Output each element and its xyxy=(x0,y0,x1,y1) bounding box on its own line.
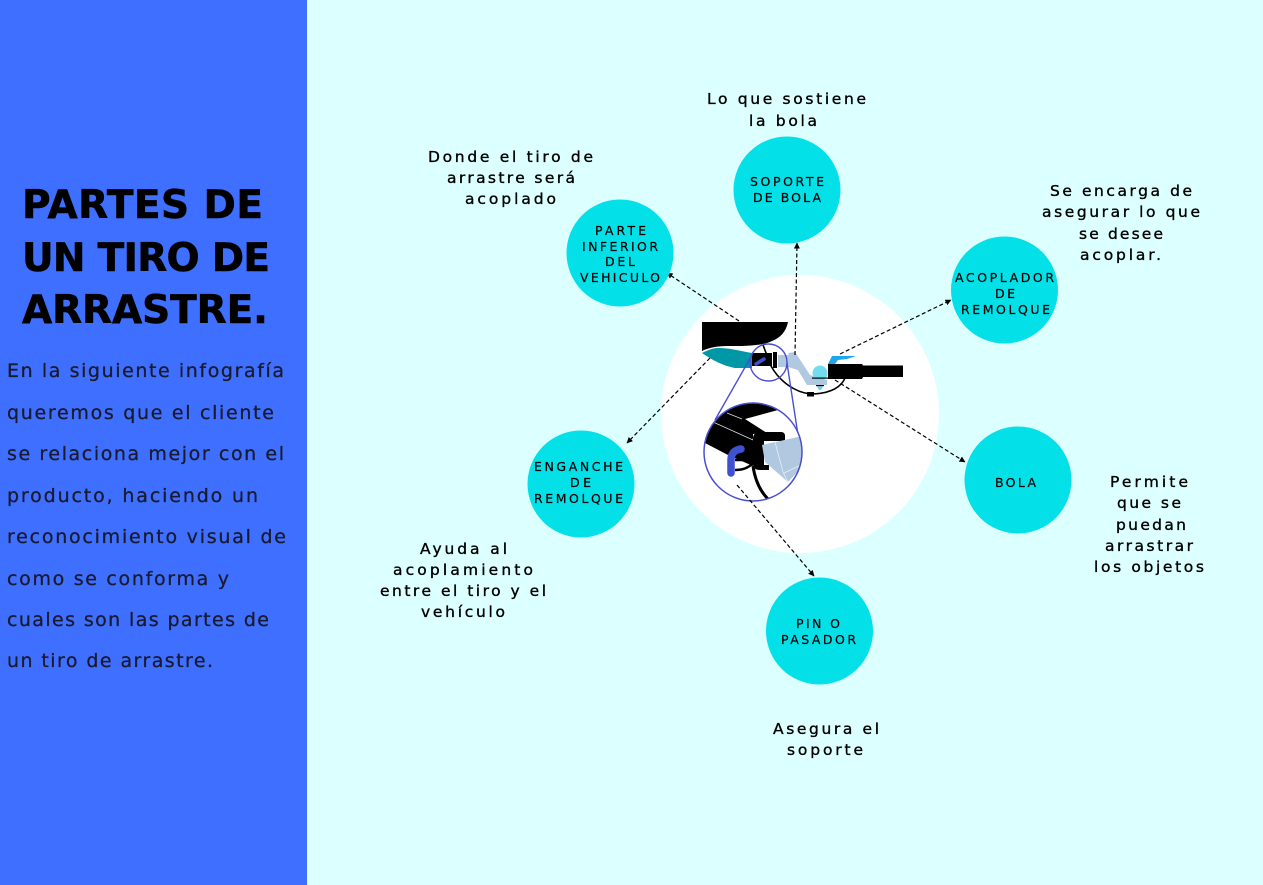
arrow: pin xyxy=(737,485,814,576)
node: enganche de remolque xyxy=(528,430,634,538)
arrow: bola xyxy=(835,380,965,462)
caption: pin: soporte xyxy=(787,741,863,759)
node: pin o pasador: PASADOR xyxy=(781,632,856,647)
intro paragraph: como se conforma y xyxy=(7,568,229,590)
caption: soporte de bola: la bola xyxy=(749,112,817,130)
node: soporte de bola xyxy=(734,136,840,244)
caption: acoplador: se desee xyxy=(1079,225,1163,243)
caption: bola: arrastrar xyxy=(1105,537,1194,555)
caption: enganche xyxy=(380,540,546,621)
caption: bola: Permite xyxy=(1110,473,1188,491)
intro paragraph: cuales son las partes de xyxy=(7,609,269,631)
node: enganche de remolque: DE xyxy=(570,475,591,490)
caption: pin xyxy=(773,720,879,759)
node: soporte de bola: DE BOLA xyxy=(753,190,821,205)
caption: bola: que se xyxy=(1117,494,1181,512)
caption: parte inferior: arrastre será xyxy=(447,169,575,187)
node: parte inferior del vehiculo xyxy=(566,200,674,306)
intro paragraph: se relaciona mejor con el xyxy=(7,443,284,465)
title: UN TIRO DE xyxy=(22,236,270,281)
coupler bar xyxy=(828,364,903,379)
node: pin o pasador: PIN O xyxy=(796,616,840,631)
arrow: acoplador xyxy=(840,300,951,354)
hitch receiver teal xyxy=(702,348,752,368)
node: acoplador de remolque: REMOLQUE xyxy=(961,302,1050,317)
latch handle xyxy=(828,356,856,364)
intro paragraph xyxy=(7,360,286,672)
title: PARTES DE xyxy=(22,183,263,228)
central white circle xyxy=(661,275,939,553)
caption: pin: Asegura el xyxy=(773,720,879,738)
intro paragraph: reconocimiento visual de xyxy=(7,526,286,548)
caption: enganche: acoplamiento xyxy=(393,561,533,579)
title: ARRASTRE. xyxy=(22,288,268,333)
caption: bola: los objetos xyxy=(1094,558,1204,576)
node: soporte de bola: SOPORTE xyxy=(750,174,824,189)
intro paragraph: queremos que el cliente xyxy=(7,402,274,424)
arrow: soporte de bola xyxy=(795,243,797,355)
magnifier lines xyxy=(715,355,798,435)
node: parte inferior del vehiculo: INFERIOR xyxy=(582,239,658,254)
caption: parte inferior xyxy=(428,148,593,208)
intro paragraph: producto, haciendo un xyxy=(7,485,258,507)
light blue drawbar xyxy=(778,352,827,385)
caption: acoplador: acoplar. xyxy=(1080,246,1161,264)
intro paragraph: En la siguiente infografía xyxy=(7,360,284,382)
arrow: enganche xyxy=(627,358,710,443)
caption: bola: puedan xyxy=(1116,516,1186,534)
intro paragraph: un tiro de arrastre. xyxy=(7,650,213,672)
caption: parte inferior: acoplado xyxy=(465,190,556,208)
caption: acoplador: Se encarga de xyxy=(1050,182,1192,200)
node: bola xyxy=(964,426,1072,534)
receiver tube xyxy=(752,352,777,368)
node: acoplador de remolque: ACOPLADOR xyxy=(955,270,1054,285)
caption: soporte de bola: Lo que sostiene xyxy=(707,90,866,108)
node: pin o pasador xyxy=(766,578,873,684)
title xyxy=(22,183,270,333)
vehicle underside xyxy=(702,322,788,351)
arrow: parte inferior xyxy=(667,273,739,321)
small magnifier ring xyxy=(750,344,787,381)
node: parte inferior del vehiculo: DEL xyxy=(605,254,635,269)
safety cable xyxy=(763,345,845,394)
node: enganche de remolque: ENGANCHE xyxy=(534,459,623,474)
caption: enganche: entre el tiro y el xyxy=(380,582,546,600)
illustration: tow hitch xyxy=(700,322,903,501)
caption: acoplador: asegurar lo que xyxy=(1042,203,1200,221)
node: acoplador de remolque xyxy=(951,236,1058,344)
tow ball xyxy=(812,366,828,380)
node: parte inferior del vehiculo: VEHICULO xyxy=(580,270,660,285)
caption: enganche: vehículo xyxy=(421,603,505,621)
pin small xyxy=(756,359,764,364)
cable connector xyxy=(807,392,814,396)
node: acoplador de remolque: DE xyxy=(995,286,1015,301)
panel: left sidebar xyxy=(0,0,307,885)
node: bola: BOLA xyxy=(995,475,1036,490)
caption: enganche: Ayuda al xyxy=(420,540,507,558)
large magnifier ring xyxy=(704,403,802,501)
caption: bola xyxy=(1094,473,1204,576)
node: parte inferior del vehiculo: PARTE xyxy=(595,223,646,238)
enlarged detail xyxy=(706,404,802,499)
caption: soporte de bola xyxy=(707,90,866,130)
caption: parte inferior: Donde el tiro de xyxy=(428,148,593,166)
node: enganche de remolque: REMOLQUE xyxy=(534,491,623,506)
caption: acoplador xyxy=(1042,182,1200,264)
